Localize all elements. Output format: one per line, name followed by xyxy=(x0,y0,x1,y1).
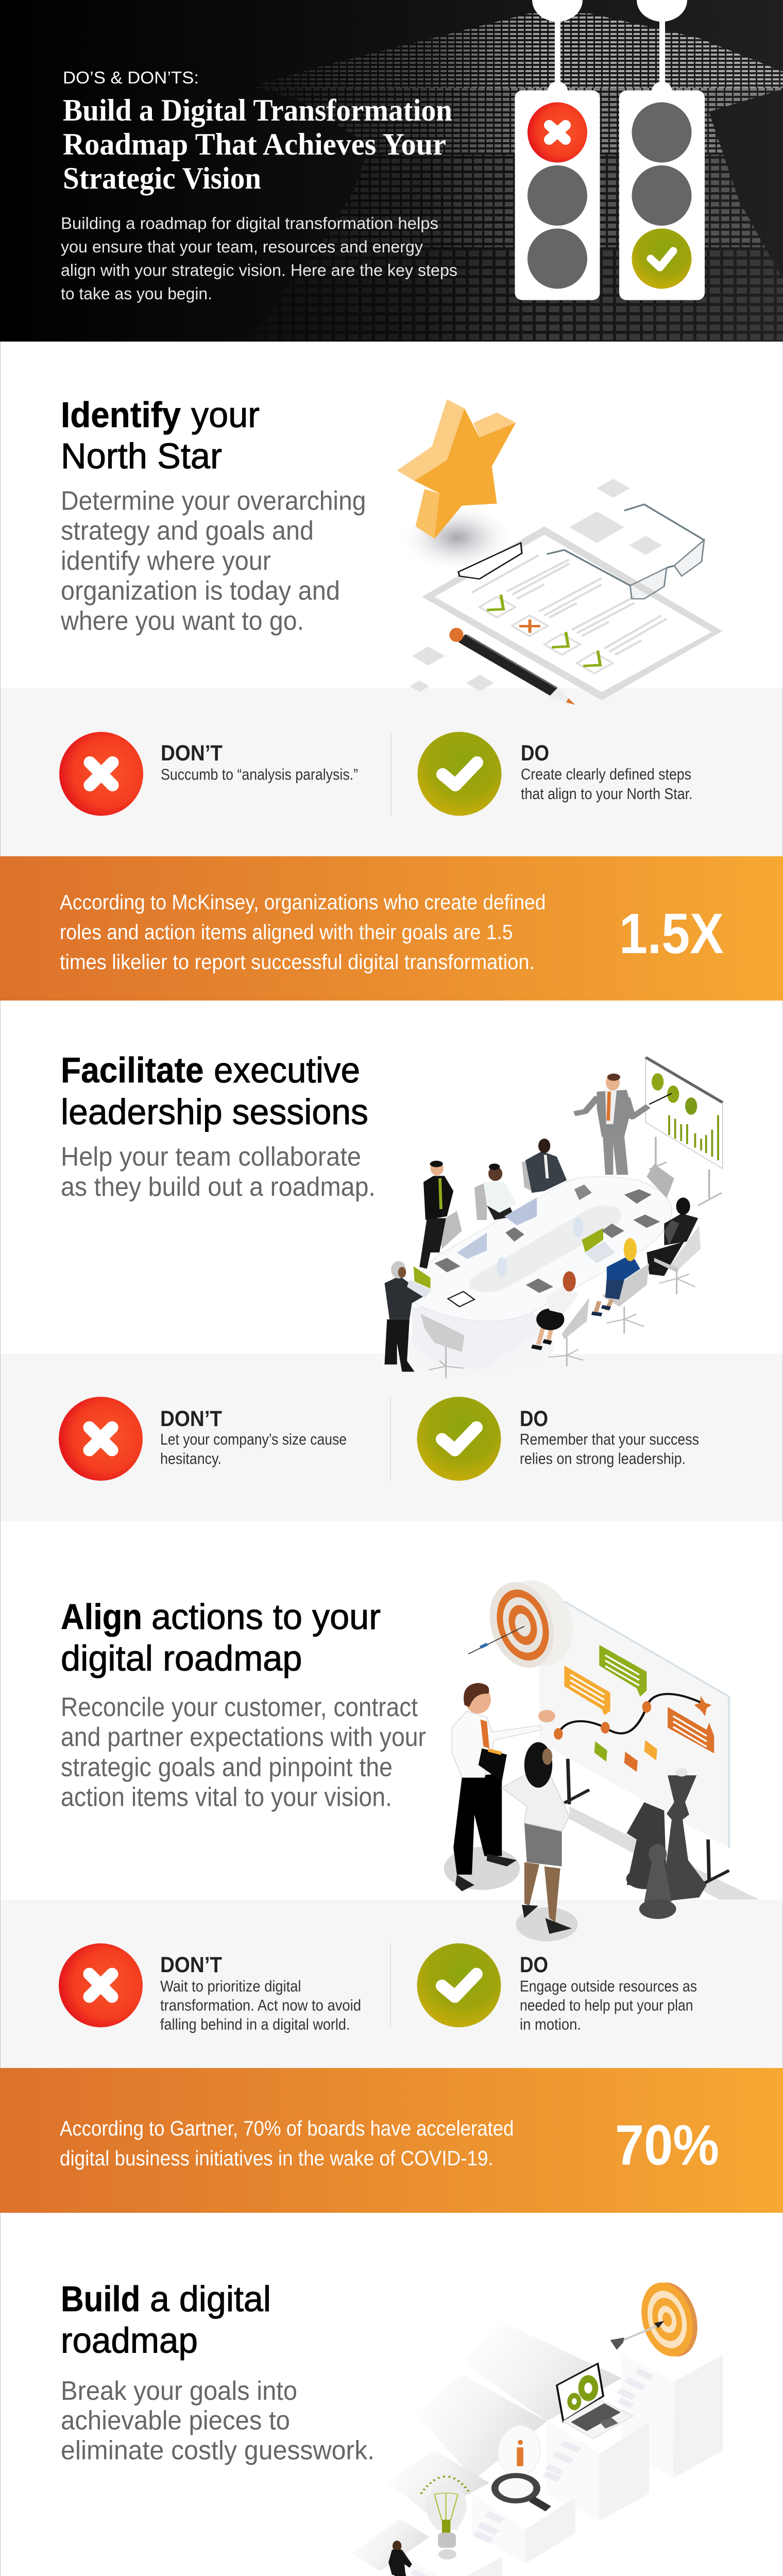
heading xyxy=(61,1050,368,1132)
don't item: hesitancy. xyxy=(160,1450,222,1467)
callout: McKinsey 1.5X: roles and action items aligned with their goals are 1.5 xyxy=(60,920,513,944)
don't item: Let your company’s size cause xyxy=(160,1430,347,1448)
do item: that align to your North Star. xyxy=(521,785,692,803)
hero eyebrow: DO’S & DON’TS: xyxy=(63,68,199,87)
icon: green check xyxy=(417,1943,501,2027)
heading: a digital xyxy=(150,2279,271,2319)
target with arrow xyxy=(468,1575,582,1673)
icon: red cross xyxy=(59,1943,143,2027)
heading: Facilitate xyxy=(61,1050,204,1090)
illustration: staircase to target xyxy=(352,2280,723,2576)
roadmap board xyxy=(539,1601,729,1848)
body text: strategic goals and pinpoint the xyxy=(61,1753,393,1783)
callout: McKinsey 1.5X xyxy=(0,856,783,1001)
don't item: Wait to prioritize digital xyxy=(160,1977,301,1995)
walking man xyxy=(388,2540,412,2576)
laptop with gears xyxy=(557,2364,633,2439)
body text: as they build out a roadmap. xyxy=(61,1172,376,1202)
do and don't strip background xyxy=(1,1354,782,1521)
do item: Create clearly defined steps xyxy=(521,765,691,783)
callout: McKinsey 1.5X: According to McKinsey, organizations who create defined xyxy=(60,890,546,914)
body text: strategy and goals and xyxy=(61,516,314,546)
body text: Determine your overarching xyxy=(61,486,366,516)
body text: achievable pieces to xyxy=(61,2405,290,2435)
heading xyxy=(61,2279,271,2361)
do item xyxy=(417,1943,697,2033)
target with arrow xyxy=(610,2280,704,2359)
illustration: roadmap board, people and chess xyxy=(444,1575,759,1941)
panel: build a digital roadmap xyxy=(1,2279,782,2576)
presenter xyxy=(574,1074,672,1175)
hero intro text: you ensure that your team, resources and energy xyxy=(61,238,423,256)
icon: green check xyxy=(417,732,502,816)
icon: red cross xyxy=(59,1397,143,1481)
hero title: Roadmap That Achieves Your xyxy=(63,127,446,161)
don't item: Succumb to “analysis paralysis.” xyxy=(161,766,358,784)
body text xyxy=(61,1142,376,1202)
do item xyxy=(417,732,692,816)
callout: McKinsey 1.5X: times likelier to report successful digital transformation. xyxy=(60,950,535,974)
heading: Identify xyxy=(61,395,181,435)
do and don't strip background xyxy=(1,688,782,856)
seated man right xyxy=(646,1197,701,1294)
woman xyxy=(502,1742,578,1941)
don't item xyxy=(59,1397,347,1481)
standing man front xyxy=(384,1261,432,1372)
info bubble and magnifier xyxy=(495,2425,548,2509)
icon: green traffic light xyxy=(619,0,705,300)
callout: Gartner 70%: According to Gartner, 70% of boards have accelerated xyxy=(60,2116,514,2140)
heading: executive xyxy=(214,1050,360,1090)
seated man dark suit xyxy=(522,1139,567,1193)
table laptops and papers xyxy=(434,1184,660,1307)
hero intro text: Building a roadmap for digital transformation helps xyxy=(61,214,438,233)
illustration: star and checklist xyxy=(397,399,723,705)
heading xyxy=(61,1597,381,1679)
light bulb xyxy=(421,2477,470,2560)
do item: needed to help put your plan xyxy=(520,1996,693,2014)
body text: Break your goals into xyxy=(61,2376,297,2406)
heading: actions to your xyxy=(151,1597,381,1637)
callout: Gartner 70% xyxy=(0,2068,783,2213)
dotted road background xyxy=(247,0,783,342)
empty chairs xyxy=(420,1164,674,1378)
panel: align actions to your digital roadmap xyxy=(1,1575,782,2068)
hero title: Strategic Vision xyxy=(63,161,261,195)
do item: DO xyxy=(520,1406,548,1431)
illustration: conference table meeting xyxy=(384,1057,723,1378)
seated woman white shirt xyxy=(474,1163,537,1225)
do item: Engage outside resources as xyxy=(520,1977,697,1995)
man with clipboard xyxy=(444,1683,555,1891)
don't item xyxy=(59,732,358,816)
standing man arms crossed xyxy=(419,1161,462,1269)
body text xyxy=(61,2376,375,2466)
whiteboard chart xyxy=(645,1057,723,1206)
body text: and partner expectations with your xyxy=(61,1722,426,1752)
body text: identify where your xyxy=(61,546,271,576)
heading: North Star xyxy=(61,436,222,476)
don't item xyxy=(59,1943,361,2033)
don't item: transformation. Act now to avoid xyxy=(160,1996,361,2014)
heading: leadership sessions xyxy=(61,1092,368,1132)
do item: DO xyxy=(521,741,549,766)
body text xyxy=(61,1692,426,1812)
don't item: DON’T xyxy=(160,1953,222,1977)
do item: in motion. xyxy=(520,2015,581,2033)
heading xyxy=(61,395,260,476)
hero intro text xyxy=(61,214,457,303)
hero title: Build a Digital Transformation xyxy=(63,93,452,127)
heading: Align xyxy=(61,1597,142,1637)
body text: organization is today and xyxy=(61,576,340,606)
panel: facilitate executive leadership sessions xyxy=(1,1050,782,1521)
do item: Remember that your success xyxy=(520,1430,699,1448)
heading: Build xyxy=(61,2279,140,2319)
seated woman blue xyxy=(592,1238,649,1334)
icon: green check xyxy=(417,1397,501,1481)
hero title xyxy=(63,93,452,195)
body text xyxy=(60,486,366,636)
heading: your xyxy=(191,395,260,435)
don't item: DON’T xyxy=(160,1406,222,1431)
heading: roadmap xyxy=(61,2320,198,2361)
seated woman red hair xyxy=(532,1272,589,1366)
do item: DO xyxy=(520,1953,548,1977)
icon: red traffic light xyxy=(515,0,600,300)
do and don't strip background xyxy=(1,1900,782,2068)
callout: McKinsey 1.5X: 1.5X xyxy=(619,902,724,965)
do item xyxy=(417,1397,699,1481)
do item: relies on strong leadership. xyxy=(520,1450,686,1467)
icon: red cross xyxy=(59,732,143,816)
callout: Gartner 70%: 70% xyxy=(615,2114,719,2177)
callout: Gartner 70%: digital business initiatives in the wake of COVID-19. xyxy=(60,2146,493,2170)
body text: eliminate costly guesswork. xyxy=(61,2436,375,2466)
hero panel xyxy=(0,0,783,342)
body text: where you want to go. xyxy=(60,606,304,636)
panel: identify your North Star xyxy=(1,395,782,856)
don't item: DON’T xyxy=(161,741,223,766)
hero intro text: to take as you begin. xyxy=(61,284,212,303)
body text: action items vital to your vision. xyxy=(61,1782,392,1812)
body text: Help your team collaborate xyxy=(61,1142,361,1172)
don't item: falling behind in a digital world. xyxy=(160,2015,350,2033)
body text: Reconcile your customer, contract xyxy=(61,1692,418,1722)
heading: digital roadmap xyxy=(61,1638,302,1679)
hero intro text: align with your strategic vision. Here are the key steps xyxy=(61,261,457,280)
chess pieces xyxy=(626,1768,707,1919)
